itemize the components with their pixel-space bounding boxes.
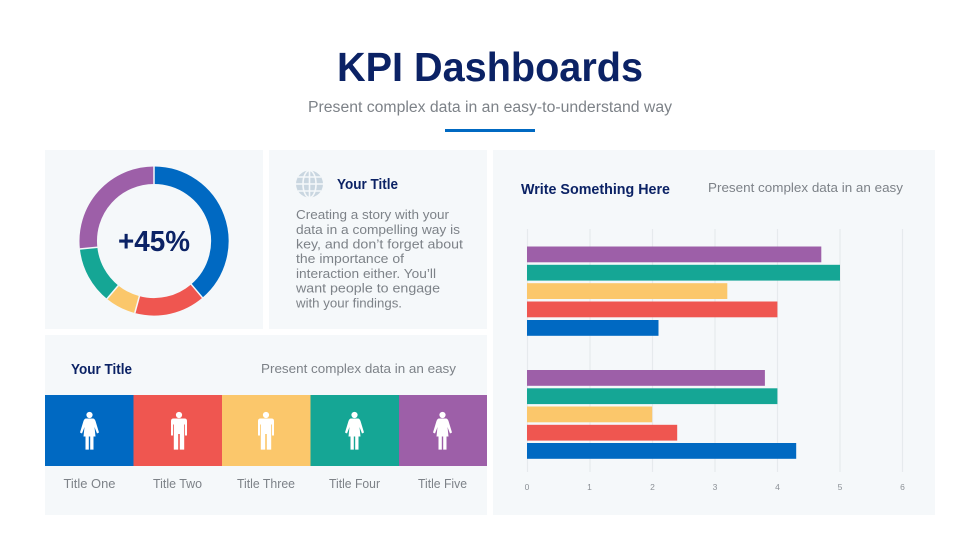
card body text: the importance of [296,251,404,266]
color tile: Title Five [399,395,487,491]
color tile: Title Two: Title Two [153,476,202,491]
x axis labels: 3 [713,482,718,492]
card heading: Your Title [337,177,398,193]
card body text: Creating a story with your [296,207,450,222]
x axis labels: 2 [650,482,655,492]
panel: text card [269,150,487,329]
x axis labels: 4 [775,482,780,492]
panel: bar chart [493,150,935,515]
color tile: Title One [45,395,134,491]
people subtitle: Present complex data in an easy [261,361,457,376]
x axis labels: 1 [587,482,592,492]
color tile: Title Three [222,395,310,491]
panel: donut [45,150,263,329]
card body text: with your findings. [295,296,402,310]
color tile: Title Five: Title Five [418,476,467,491]
title underline [445,129,535,132]
color tile: Title Three: Title Three [237,476,295,491]
title: KPI Dashboards [337,44,643,90]
color tile: Title Four: Title Four [329,476,381,491]
icon: globe [296,170,323,198]
bar group: lower [527,370,796,459]
x axis labels [525,482,905,492]
people heading: Your Title [71,362,132,378]
card body text: data in a compelling way is [296,222,461,237]
card body text: key, and don’t forget about [296,236,463,252]
donut value: +45% [118,226,190,258]
x axis labels: 0 [525,482,530,492]
color tile: Title One: Title One [64,476,116,491]
card body text: interaction either. You’ll [296,266,436,281]
x axis labels: 6 [900,482,905,492]
chart subtitle: Present complex data in an easy [708,180,904,195]
card body text: want people to engage [295,280,440,296]
donut chart [80,166,220,313]
card body text [295,207,463,310]
color tile: Title Two [134,395,222,491]
x axis labels: 5 [838,482,843,492]
chart heading: Write Something Here [521,181,670,198]
panel: people [45,335,487,515]
bar group: upper [527,246,840,336]
subtitle: Present complex data in an easy-to-understand way [308,99,672,116]
color tile: Title Four [310,395,399,491]
